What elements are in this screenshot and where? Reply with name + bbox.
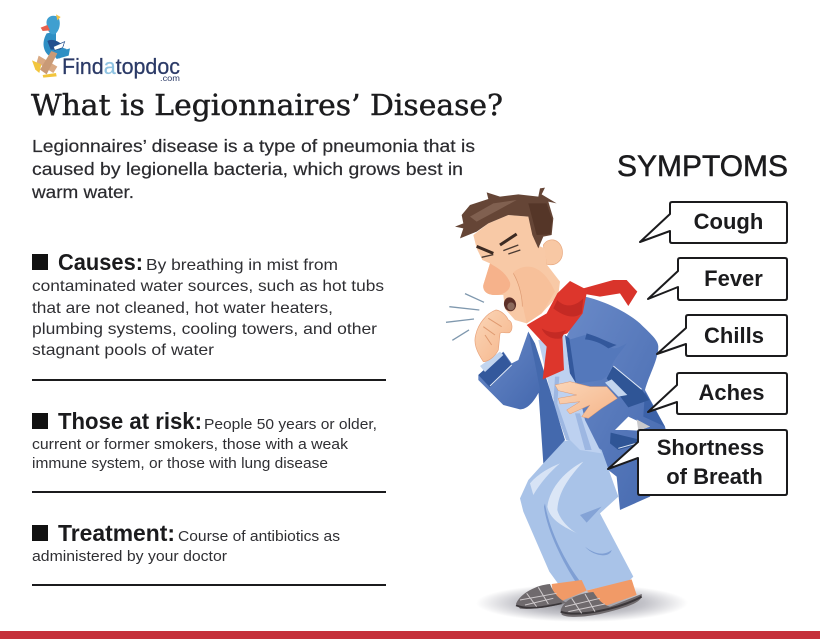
risk text: People 50 years or older,: [204, 416, 377, 433]
callout: cough: [640, 202, 787, 243]
head: [446, 188, 562, 340]
causes text: stagnant pools of water: [32, 342, 215, 359]
sleeve: [478, 332, 540, 409]
hanky in pocket: [615, 417, 650, 431]
callout: aches: Aches: [698, 380, 765, 405]
causes text: [32, 257, 384, 359]
brows and closed eyes: [477, 234, 517, 253]
bullet square: [32, 254, 48, 270]
sleeve cuff: [478, 353, 512, 387]
pajama legs: [520, 437, 633, 591]
fist: [475, 310, 512, 362]
causes text: that are not cleaned, hot water heaters,: [32, 300, 333, 317]
cough lines: [446, 294, 484, 340]
nose: [483, 263, 510, 295]
bottom bar: [0, 631, 820, 639]
callout: shortness of breath: of Breath: [666, 464, 763, 489]
panel: those at risk: [32, 408, 377, 472]
risk text: [32, 416, 377, 472]
panel: treatment: [32, 520, 340, 565]
shirt cuff: [480, 352, 503, 372]
scarf: [527, 280, 637, 379]
treatment text: administered by your doctor: [32, 548, 227, 565]
intro text: Legionnaires’ disease is a type of pneumonia that is: [32, 136, 475, 156]
pocket: [610, 433, 638, 450]
causes text: plumbing systems, cooling towers, and other: [32, 321, 378, 338]
hand on stomach: [555, 382, 617, 418]
callout: shortness of breath: [608, 430, 787, 495]
mouth: [502, 296, 518, 313]
slippers: [516, 584, 567, 609]
heading: symptoms: SYMPTOMS: [617, 150, 788, 183]
legs and slippers: [516, 437, 642, 617]
callout: shortness of breath: Shortness: [657, 435, 764, 460]
callout: fever: Fever: [704, 266, 763, 291]
panel: causes: [32, 249, 384, 359]
intro text: [31, 136, 475, 202]
bullet square: [32, 525, 48, 541]
logo wordmark: Findatopdoc: [62, 54, 180, 79]
cheek shading: [513, 267, 555, 323]
left jacket panel: [520, 332, 565, 463]
upper body front: [475, 310, 649, 463]
heading: treatment: Treatment:: [58, 520, 175, 546]
jacket edge: [565, 335, 576, 383]
callout: chills: [657, 315, 787, 356]
callout: cough: Cough: [694, 209, 763, 234]
callout: fever: [648, 258, 787, 300]
ankles: [552, 580, 587, 602]
jacket back: [567, 297, 670, 510]
causes text: By breathing in mist from: [146, 257, 338, 274]
treatment text: Course of antibiotics as: [178, 528, 340, 545]
floor shadow: [476, 584, 688, 622]
risk text: immune system, or those with lung disease: [32, 455, 328, 472]
callout: chills: Chills: [704, 323, 764, 348]
heading: those at risk: Those at risk:: [58, 408, 202, 434]
hair: [455, 188, 557, 248]
illustration: coughing man: [446, 188, 688, 622]
logo: Findatopdoc: [32, 14, 180, 83]
intro text: caused by legionella bacteria, which grows best in: [32, 159, 463, 179]
face: [473, 215, 560, 323]
intro text: warm water.: [31, 182, 134, 202]
icon: duck mascot: [32, 14, 70, 78]
heading: causes: Causes:: [58, 249, 143, 275]
logo .com: .com: [160, 73, 180, 83]
far arm cuff: [607, 366, 649, 407]
ear: [543, 240, 562, 265]
shirt: [538, 335, 602, 453]
callout: aches: [648, 373, 787, 414]
causes text: contaminated water sources, such as hot tubs: [32, 278, 384, 295]
bullet square: [32, 413, 48, 429]
treatment text: [32, 528, 340, 565]
risk text: current or former smokers, those with a weak: [32, 436, 349, 453]
title: What is Legionnaires’ Disease?: [31, 88, 503, 122]
